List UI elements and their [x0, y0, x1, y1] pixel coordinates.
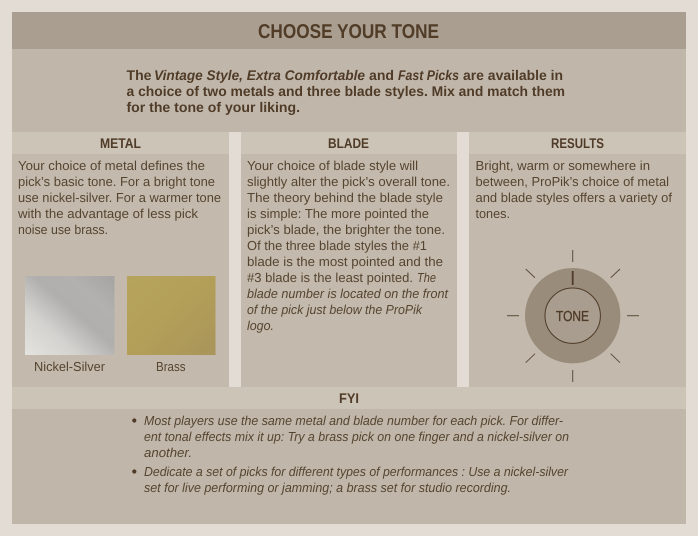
blade description: slightly alter the pick’s overall tone. — [247, 174, 450, 189]
intro panel: a choice of two metals and three blade styles. Mix and match them — [126, 83, 565, 99]
intro panel: Fast Picks — [398, 67, 459, 83]
heading: metal: METAL — [100, 135, 141, 151]
title bar — [12, 12, 686, 49]
bullet: same metal tip: Most players use the same metal and blade number for each pick. For differ- — [144, 413, 564, 428]
blade description: is simple: The more pointed the — [247, 206, 429, 221]
heading: results: RESULTS — [551, 135, 604, 151]
bullet: performance sets tip: set for live performing or jamming; a brass set for studio recording. — [144, 480, 511, 495]
blade description: #3 blade is the least pointed. — [247, 270, 413, 285]
intro panel — [12, 49, 686, 132]
bullet: same metal tip: ent tonal effects mix it up: Try a brass pick on one finger and a nickel-silver on — [144, 429, 569, 444]
results description — [476, 158, 672, 221]
blade description: Your choice of blade style will — [247, 158, 418, 173]
metal description — [17, 158, 221, 237]
bullet: performance sets tip — [132, 464, 569, 495]
panel: fyi — [12, 387, 686, 524]
blade description: Of the three blade styles the #1 — [247, 238, 427, 253]
swatch: brass — [127, 276, 216, 374]
bullet: same metal tip — [132, 413, 569, 460]
blade description: blade number is located on the front — [247, 286, 449, 301]
blade description: pick’s blade, the brighter the tone. — [247, 222, 445, 237]
panel: results — [469, 132, 686, 387]
blade description: blade is the most pointed and the — [247, 254, 443, 269]
blade description — [247, 158, 450, 333]
blade description: The — [417, 270, 436, 285]
intro panel: are available in — [463, 67, 563, 83]
blade description: The theory behind the blade style — [247, 190, 443, 205]
swatch: nickel-silver — [25, 276, 114, 374]
heading: blade: BLADE — [328, 135, 369, 151]
results description: between, ProPik’s choice of metal — [476, 174, 669, 189]
intro panel: Vintage Style, Extra Comfortable — [154, 67, 365, 83]
metal description: noise use brass. — [18, 222, 108, 237]
panel: metal — [12, 132, 229, 387]
tone dial: TONE — [556, 309, 589, 325]
metal description: Your choice of metal defines the — [18, 158, 205, 173]
bullet: performance sets tip: Dedicate a set of picks for different types of performances : Use a nickel-silver — [144, 464, 569, 479]
blade description: of the pick just below the ProPik — [247, 302, 423, 317]
results description: Bright, warm or somewhere in — [476, 158, 650, 173]
results description: and blade styles offers a variety of — [476, 190, 672, 205]
metal description: use nickel-silver. For a warmer tone — [18, 190, 221, 205]
swatch: brass: Brass — [156, 359, 186, 374]
metal description: with the advantage of less pick — [17, 206, 198, 221]
heading: fyi: FYI — [339, 390, 359, 406]
panel: blade — [241, 132, 457, 387]
swatch: nickel-silver: Nickel-Silver — [34, 359, 106, 374]
blade description: logo. — [247, 318, 274, 333]
intro panel: and — [369, 67, 394, 83]
metal description: pick’s basic tone. For a bright tone — [18, 174, 215, 189]
intro panel: The — [126, 67, 152, 83]
results description: tones. — [476, 206, 510, 221]
intro panel: for the tone of your liking. — [126, 99, 300, 115]
bullet: same metal tip: another. — [144, 445, 192, 460]
tone dial — [507, 250, 639, 382]
title bar: CHOOSE YOUR TONE — [258, 21, 439, 43]
